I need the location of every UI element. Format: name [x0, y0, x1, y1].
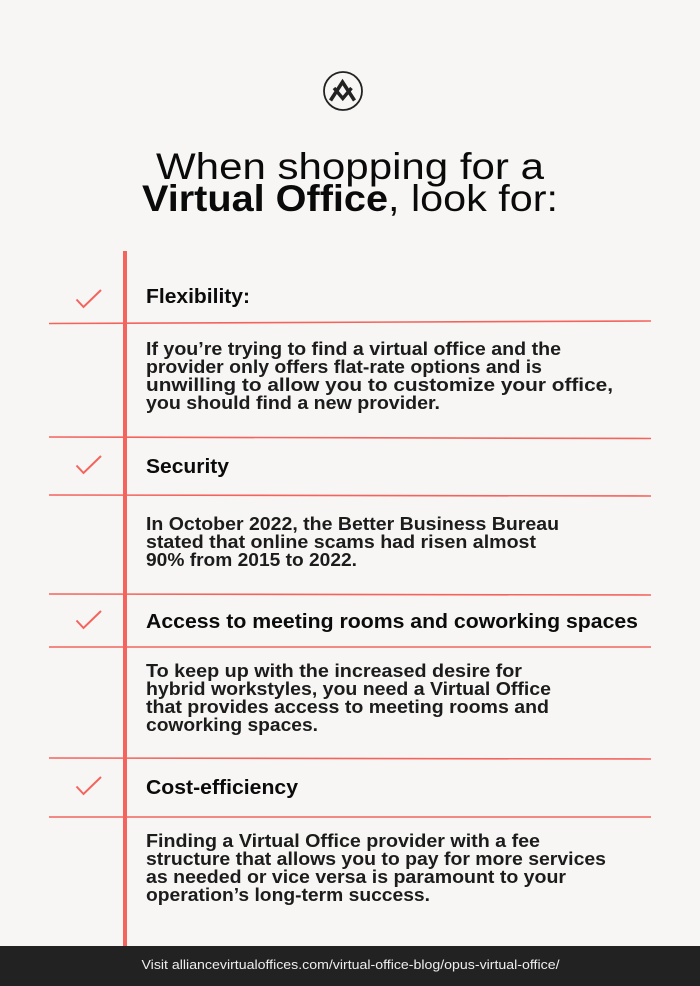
text: security body [146, 514, 559, 570]
title [142, 146, 558, 219]
text: meeting rooms body: coworking spaces. [146, 715, 318, 735]
panel: flexibility [49, 286, 651, 413]
icon: logo [324, 72, 362, 110]
text: meeting rooms body: To keep up with the increased desire for [146, 661, 522, 681]
text: flexibility body: provider only offers flat-rate options and is [146, 357, 542, 377]
divider [49, 321, 651, 324]
heading: cost-efficiency: Cost-efficiency [146, 777, 299, 799]
text: security body: In October 2022, the Better Business Bureau [146, 514, 559, 534]
text: meeting rooms body: that provides access to meeting rooms and [146, 697, 549, 717]
divider top [49, 437, 651, 438]
text: cost-efficiency body: operation’s long-term success. [146, 885, 430, 905]
title: Virtual Office [142, 178, 388, 219]
heading: security: Security [146, 456, 230, 478]
title: When shopping for a [156, 146, 544, 187]
divider top [49, 758, 651, 759]
divider top [49, 594, 651, 595]
icon: check mark [76, 456, 101, 473]
title: , look for: [388, 178, 558, 219]
panel: cost-efficiency [49, 758, 651, 905]
text: meeting rooms body [146, 661, 551, 735]
text: cost-efficiency body [146, 831, 606, 905]
divider bottom [49, 816, 651, 818]
text: cost-efficiency body: as needed or vice versa is paramount to your [146, 867, 566, 887]
footer link text: Visit alliancevirtualoffices.com/virtual-office-blog/opus-virtual-office/ [142, 957, 560, 972]
icon: check mark [76, 611, 101, 628]
divider bottom [49, 646, 651, 648]
vertical timeline line [123, 251, 127, 946]
text: flexibility body [146, 339, 613, 413]
icon: check mark [76, 290, 101, 307]
panel: security [49, 437, 651, 570]
text: cost-efficiency body: Finding a Virtual Office provider with a fee [146, 831, 540, 851]
text: flexibility body: If you’re trying to find a virtual office and the [146, 339, 561, 359]
text: security body: stated that online scams had risen almost [146, 532, 536, 552]
text: flexibility body: you should find a new provider. [146, 393, 440, 413]
text: cost-efficiency body: structure that allows you to pay for more services [146, 849, 606, 869]
heading: meeting rooms: Access to meeting rooms and coworking spaces [146, 611, 638, 633]
text: security body: 90% from 2015 to 2022. [146, 550, 357, 570]
text: meeting rooms body: hybrid workstyles, you need a Virtual Office [146, 679, 551, 699]
footer bar [0, 946, 700, 986]
divider bottom [49, 495, 651, 496]
heading: flexibility: Flexibility: [146, 286, 250, 308]
panel: meeting rooms [49, 594, 651, 735]
icon: check mark [76, 777, 101, 794]
text: flexibility body: unwilling to allow you to customize your office, [146, 375, 613, 395]
